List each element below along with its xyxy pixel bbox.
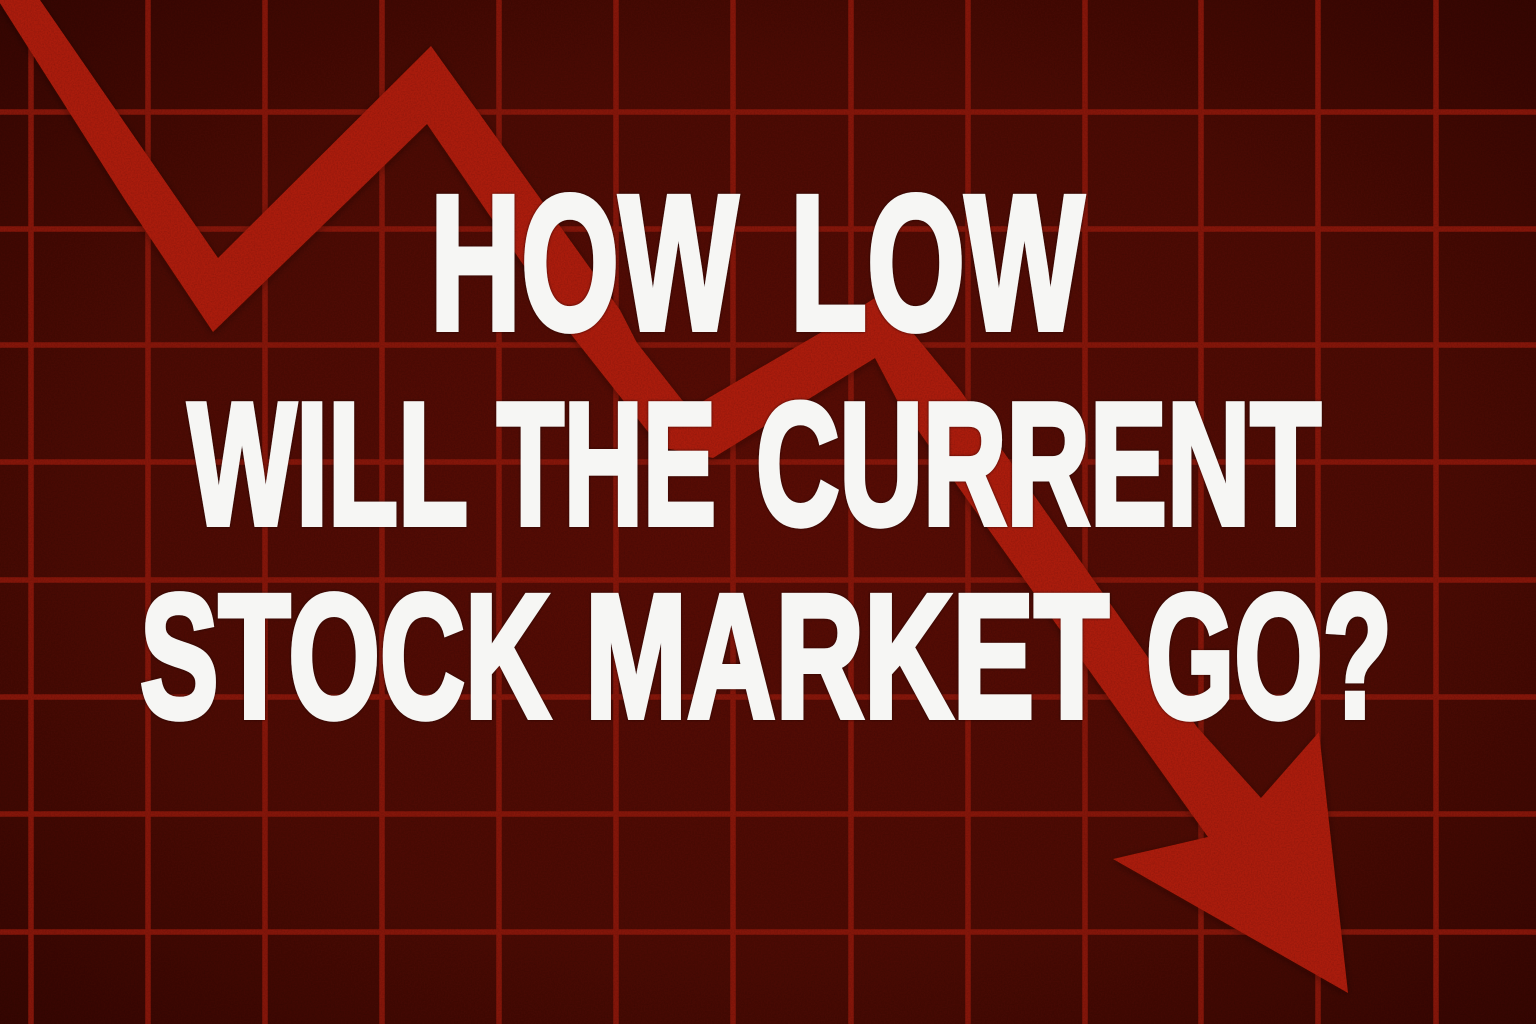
title: [140, 155, 1392, 755]
title line 1: LOW: [790, 155, 1085, 370]
title line 1: HOW: [430, 155, 739, 370]
title line 3: GO?: [1146, 559, 1392, 755]
title line 3: STOCK: [140, 559, 550, 755]
title line 2: [188, 366, 1321, 561]
title line 3: [140, 559, 1392, 755]
title line 3: MARKET: [585, 559, 1109, 755]
title line 2: THE: [497, 366, 716, 561]
title line 2: WILL: [188, 366, 468, 561]
